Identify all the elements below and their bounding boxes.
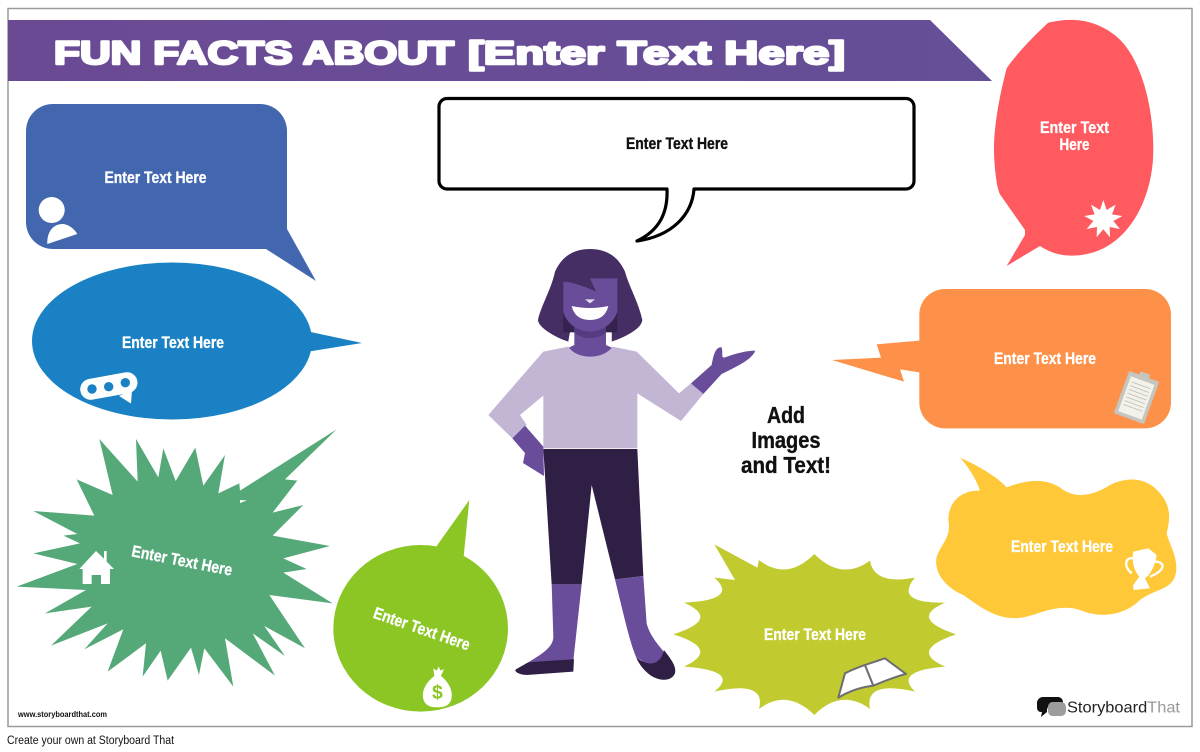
legs <box>515 449 675 680</box>
logo: storyboard that <box>1037 697 1181 717</box>
logo: storyboard that: StoryboardThat <box>1067 700 1181 716</box>
text: add images and text <box>741 402 831 478</box>
panel: yellow cloud bubble: Enter Text Here <box>1011 538 1113 556</box>
icon: starburst <box>1084 200 1122 237</box>
panel: center outlined speech bubble <box>439 98 914 241</box>
panel: red egg speech bubble: Here <box>1060 136 1090 154</box>
icon: house <box>79 551 114 584</box>
panel: blue oval speech bubble: Enter Text Here <box>122 334 224 352</box>
text: add images and text: and Text! <box>741 452 831 478</box>
title banner <box>8 20 992 81</box>
panel: red egg speech bubble <box>994 20 1153 266</box>
panel: blue oval speech bubble <box>32 262 362 420</box>
panel: red egg speech bubble: Enter Text <box>1040 119 1109 137</box>
title banner: [Enter Text Here] <box>468 35 845 71</box>
icon: money bag: $ <box>432 682 443 703</box>
footer url: www.storyboardthat.com <box>17 710 107 719</box>
panel: yellow-green spiky bubble <box>673 544 956 715</box>
torso and arms <box>488 347 755 476</box>
panel: blue rounded speech bubble <box>26 104 316 281</box>
head <box>538 249 642 358</box>
panel: yellow-green spiky bubble: Enter Text Here <box>764 626 866 644</box>
text: add images and text: Images <box>752 427 820 453</box>
panel: center outlined speech bubble: Enter Text Here <box>626 135 728 153</box>
panel: orange speech bubble <box>832 289 1171 428</box>
icon: chat bubble <box>87 378 132 404</box>
panel: lime green round bubble: Enter Text Here <box>371 604 472 654</box>
caption: Create your own at Storyboard That <box>7 735 175 747</box>
text: add images and text: Add <box>767 402 805 428</box>
icon: open book <box>838 658 906 698</box>
panel: blue rounded speech bubble: Enter Text Here <box>104 169 206 187</box>
icon: trophy <box>1126 548 1163 590</box>
panel: yellow cloud bubble <box>936 458 1176 618</box>
icon: money bag <box>423 667 452 707</box>
illustration: woman presenting <box>488 249 755 680</box>
icon: clipboard <box>1114 368 1160 424</box>
panel: green starburst bubble <box>17 429 337 687</box>
panel: orange speech bubble: Enter Text Here <box>994 350 1096 368</box>
panel: green starburst bubble: Enter Text Here <box>130 543 234 580</box>
panel: lime green round bubble <box>333 500 508 712</box>
title banner: FUN FACTS ABOUT <box>54 35 455 71</box>
icon: person <box>39 197 77 244</box>
